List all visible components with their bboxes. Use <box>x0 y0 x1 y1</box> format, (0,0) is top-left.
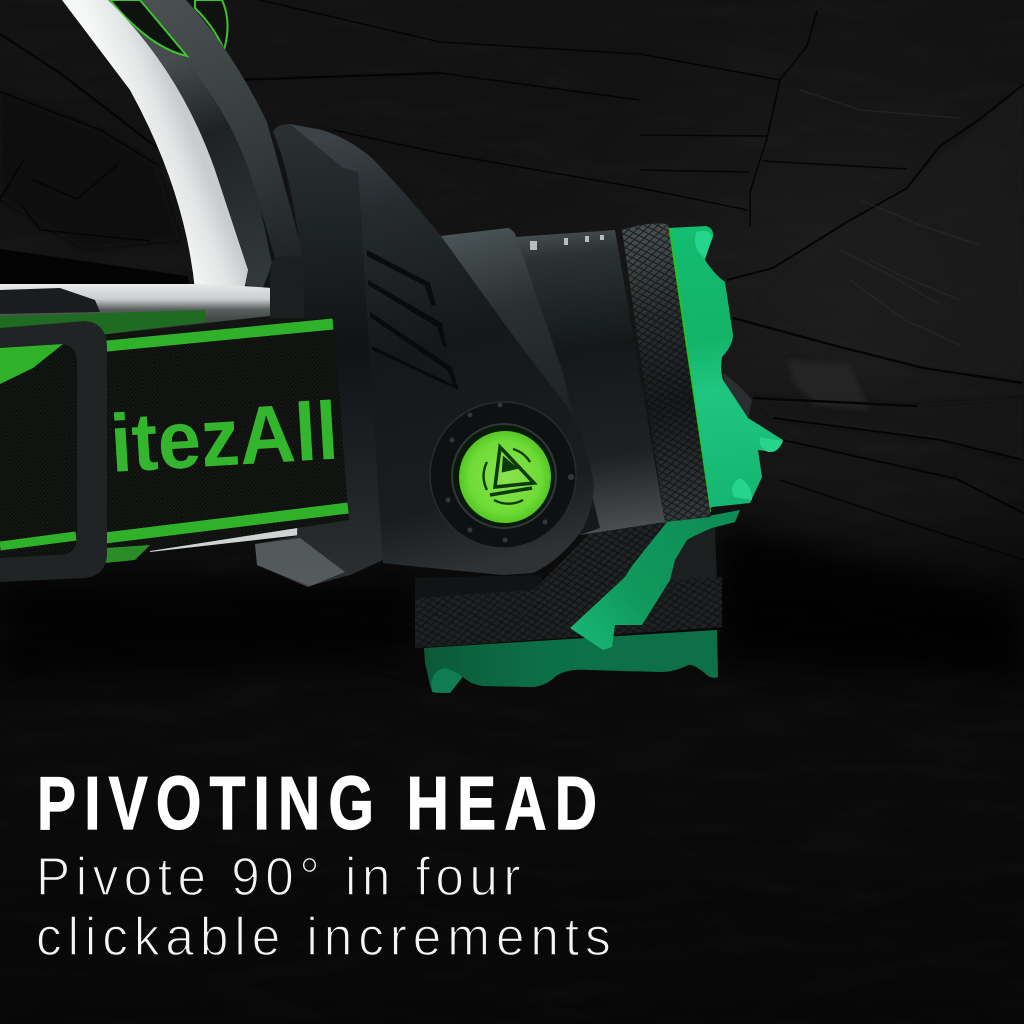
stepped collar <box>440 228 600 535</box>
green button face <box>459 431 551 523</box>
clear horizontal bar above strap <box>0 284 272 335</box>
headlamp product <box>0 0 783 693</box>
logo on button <box>484 447 534 504</box>
middle lens position <box>527 510 740 650</box>
clear bar below strap <box>150 525 300 552</box>
bezel scallop highlights <box>695 231 783 500</box>
pivot button <box>430 402 576 548</box>
housing main body <box>290 124 594 575</box>
upper green bezel <box>668 226 783 510</box>
rear knurled edge behind bezel <box>722 372 752 418</box>
button ring studs <box>446 402 574 542</box>
upper lens position <box>440 224 783 535</box>
strap bottom green stripe <box>105 508 348 538</box>
barrel micro text <box>530 235 604 250</box>
text block <box>36 762 611 967</box>
green strap seen through bar <box>0 310 205 335</box>
clear tab under strap <box>255 538 345 587</box>
clear arm behind white arc <box>143 0 304 300</box>
barrel upright section <box>600 525 717 600</box>
bezel bright green rim <box>670 228 710 512</box>
middle knurled ring <box>527 522 667 628</box>
button outer ring <box>430 402 576 548</box>
arm window between arc and arm <box>108 0 272 290</box>
buckle window <box>0 344 77 558</box>
title: PIVOTING HEAD <box>37 762 597 846</box>
rear strap seen through window <box>110 0 187 56</box>
upper knurled ring <box>622 224 711 522</box>
lower lens barrel <box>415 525 722 693</box>
lower bezel scallop highlights <box>431 668 462 693</box>
barrel cap below body <box>415 575 560 625</box>
rear clasp at strap <box>270 256 304 318</box>
rubber buckle <box>0 321 107 582</box>
strap top green stripe <box>97 324 333 347</box>
rear strap loop right of arm <box>195 0 228 50</box>
lower green bezel <box>424 630 718 693</box>
strap woven logo text: itezAll <box>108 386 341 490</box>
green stripe inside buckle <box>0 536 76 546</box>
strap tail below band <box>105 545 150 563</box>
housing vents <box>367 250 458 390</box>
button inner ring <box>452 424 556 528</box>
white plastic arc <box>62 0 248 290</box>
housing side panel <box>255 124 383 586</box>
main barrel <box>500 230 665 535</box>
dark shadow inside bar <box>0 288 100 314</box>
headband strap <box>0 317 349 582</box>
subtitle line 2: clickable increments <box>36 907 611 967</box>
middle green bezel <box>570 510 740 650</box>
subtitle line 1: Pivote 90° in four <box>36 847 520 907</box>
strap fabric <box>95 317 349 558</box>
green band inside buckle <box>0 344 63 384</box>
lower knurled ring <box>415 577 722 648</box>
